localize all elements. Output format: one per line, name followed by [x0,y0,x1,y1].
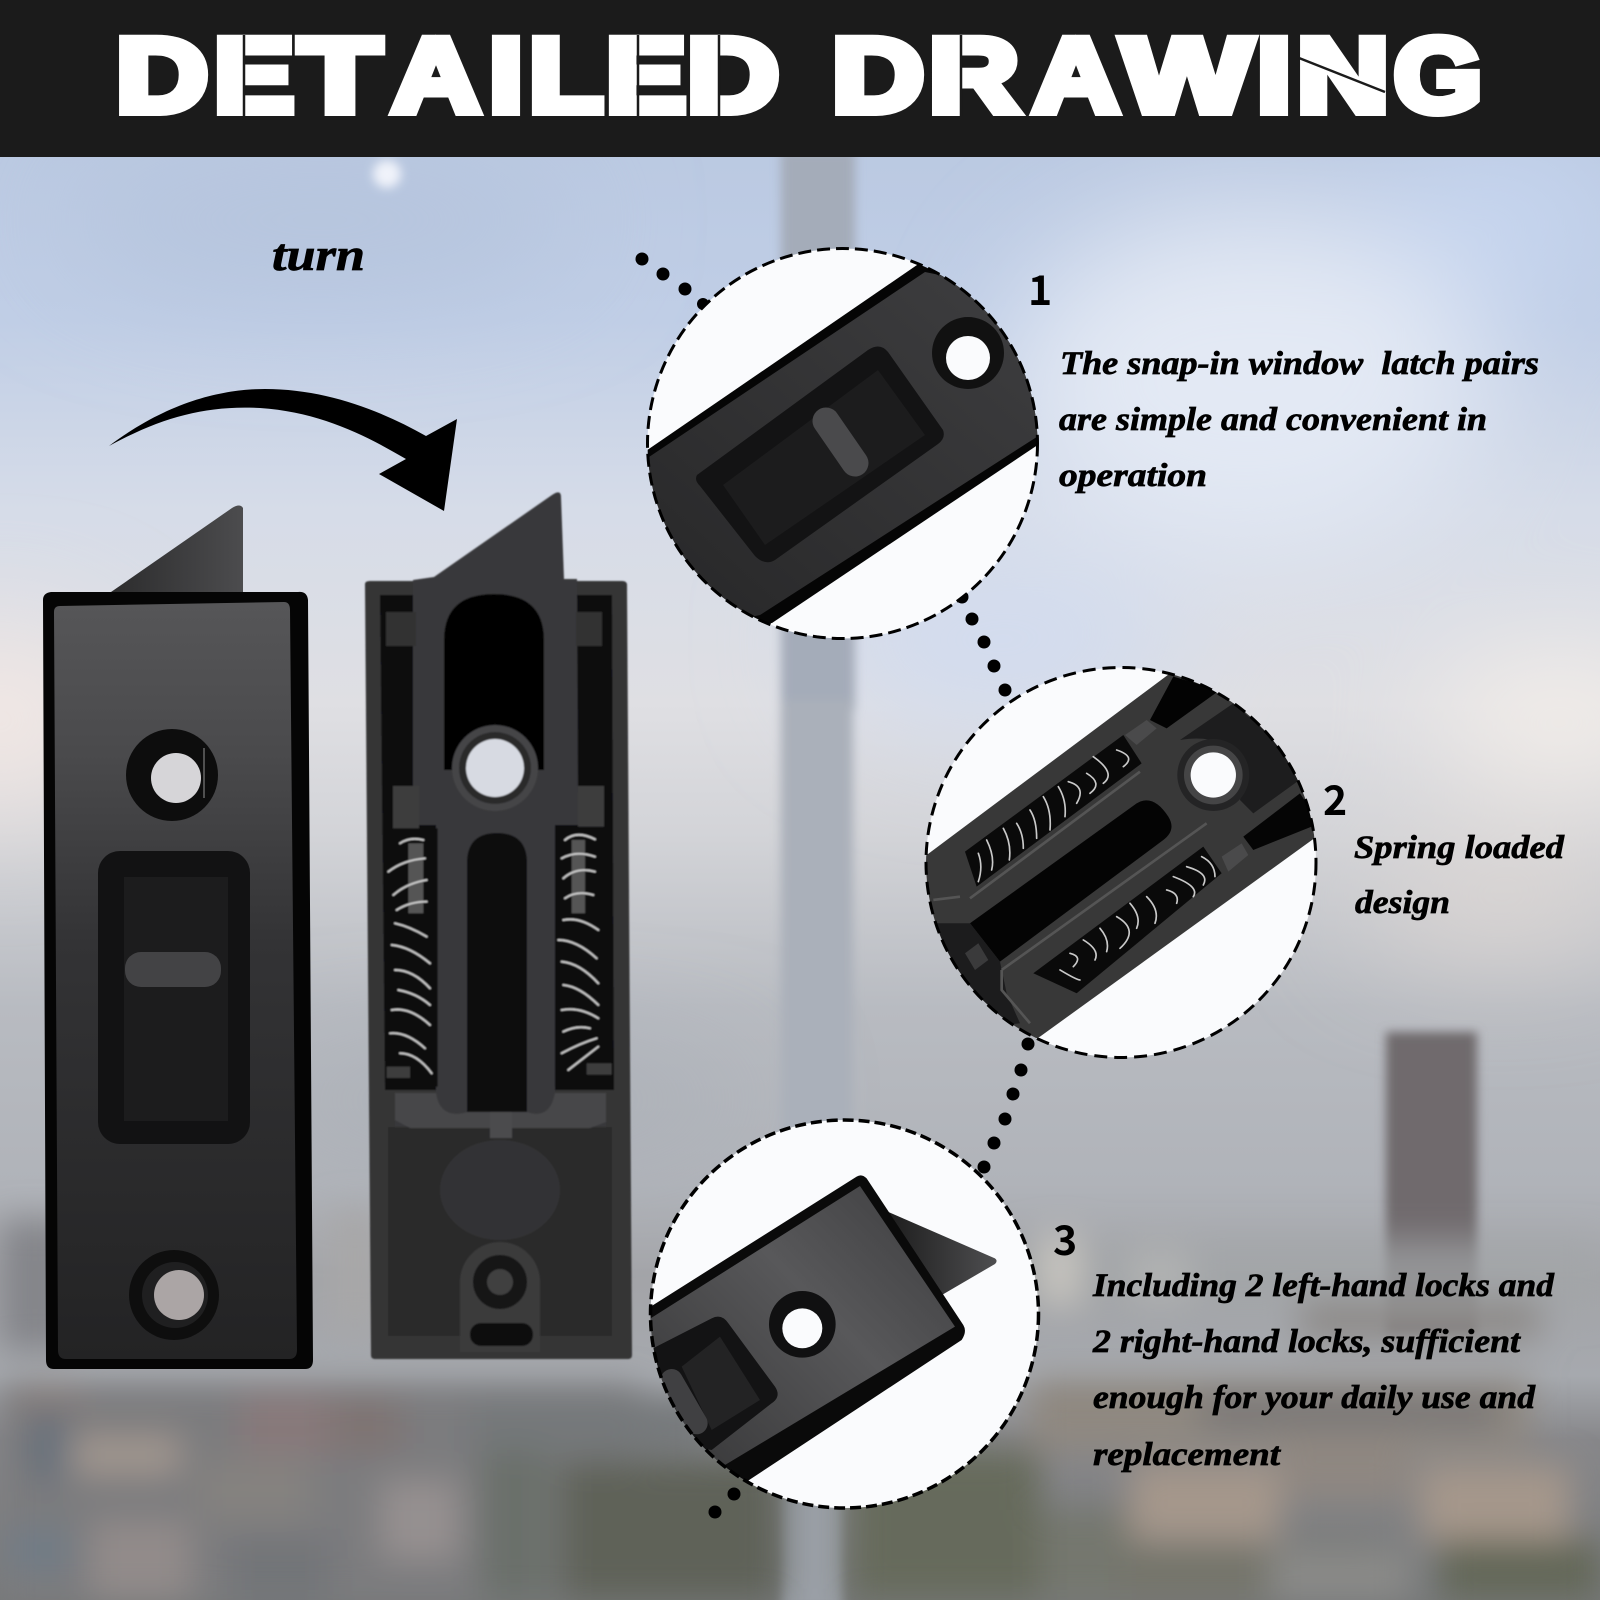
title text: A [1033,18,1119,134]
detail circle 2: springs [920,667,1337,1060]
bottom screw hole [129,1250,219,1340]
title text: D [832,18,924,134]
title text: A [392,18,480,134]
springs [978,750,1129,882]
right spring [558,835,598,1070]
feature text 2 [1354,830,1565,921]
title text: I [489,18,523,134]
title text: L [529,18,603,134]
hole [1177,739,1249,811]
body [640,1175,965,1510]
feature text 1 [1059,346,1539,494]
hole [932,317,1004,389]
pole [781,150,855,710]
feature text 3 [1092,1268,1555,1473]
title text: G [1394,18,1482,134]
title text: D [116,18,208,134]
latch wedge [111,506,243,592]
feature text 3: 2 right-hand locks, sufficient [1092,1324,1521,1360]
detail circle 1: slider [640,248,1060,640]
wedge [880,1208,997,1300]
slider tab [826,421,855,463]
sliding wedge and column [395,492,606,1127]
feature text 1: operation [1059,458,1207,494]
bottom screw boss [460,1242,540,1352]
latch: back view with springs [365,492,632,1359]
title text: W [1122,18,1252,134]
band [926,674,1314,1038]
feature text 1: are simple and convenient in [1059,402,1487,438]
housing [365,581,632,1359]
upper oval slot [444,594,544,770]
title text: T [299,18,381,134]
hole [769,1291,836,1358]
feature text 2: design [1355,885,1450,921]
feature text 1: The snap-in window latch pairs [1060,346,1539,382]
latch body [43,592,313,1369]
number 1: 1 [1028,257,1052,317]
title text: R [929,18,1019,134]
detail circle 3: wedge end [640,1120,1038,1510]
left spring [388,839,432,1073]
centre slot [970,800,1172,962]
title text: I [1257,18,1291,134]
connector dots [636,252,1034,1518]
recess [640,1317,778,1450]
recess [696,346,944,562]
band [648,265,1038,624]
tower [1386,1032,1477,1332]
slider feet [395,1093,606,1128]
title text: N [1297,18,1389,134]
feature text 3: Including 2 left-hand locks and [1092,1268,1555,1304]
arrow: turn direction [109,389,457,511]
centre screw ring [452,725,538,811]
finger recess [98,851,250,1144]
spring pockets [385,827,612,1087]
title text: E [214,18,294,134]
title banner [0,0,1600,157]
lower slot [467,833,527,1112]
label: turn: turn [272,230,365,280]
top screw hole [126,729,218,821]
title text: D [687,18,779,134]
feature text 2: Spring loaded [1354,830,1565,866]
slider tab [672,1380,697,1423]
slider tab [125,952,221,987]
title text: E [606,18,686,134]
number 2: 2 [1323,767,1347,827]
spring pockets [965,735,1142,887]
feature text 3: replacement [1093,1437,1281,1473]
feature text 3: enough for your daily use and [1093,1380,1536,1416]
number 3: 3 [1053,1207,1077,1267]
latch: front view [43,506,313,1369]
